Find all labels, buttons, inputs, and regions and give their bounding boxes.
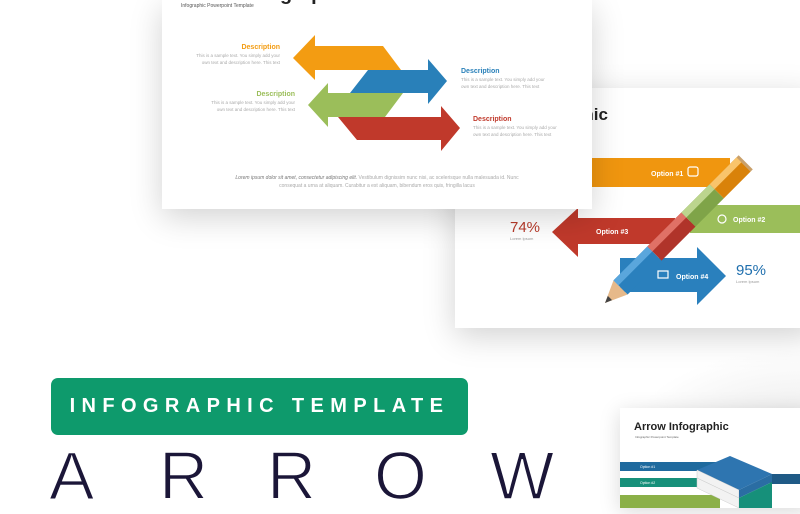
- description: green: Description: [256, 91, 295, 98]
- description: blue: own text and description here. This text: [461, 84, 539, 89]
- description: blue: This is a sample text. You simply add your: [461, 77, 545, 82]
- badge: infographic template: INFOGRAPHIC TEMPLATE: [70, 395, 449, 417]
- bands: Option #1: [640, 465, 655, 469]
- stat: 74%: 74%: [510, 219, 540, 236]
- heading: ARROW: W: [490, 438, 554, 514]
- band: orange option 1: [455, 158, 730, 187]
- slide: four arrows: [162, 0, 592, 209]
- bands: [620, 462, 800, 508]
- description: red: [473, 116, 557, 137]
- description: orange: [196, 44, 280, 65]
- bands: Option #2: [640, 481, 655, 485]
- footer text: [235, 175, 519, 189]
- stat: 95%: Lorem Ipsum: [736, 279, 759, 284]
- description: red: Description: [473, 116, 512, 123]
- description: green: own text and description here. This text: [217, 107, 295, 112]
- slide: pencil arrows: [455, 88, 800, 328]
- stat: 95%: 95%: [736, 262, 766, 279]
- heading: ARROW: R: [267, 438, 316, 514]
- band: green option 2: [690, 205, 800, 233]
- arrow: blue option 4: Option #4: [676, 274, 708, 281]
- description: orange: This is a sample text. You simply add your: [196, 53, 280, 58]
- description: blue: Description: [461, 68, 500, 75]
- arrow: red: [338, 106, 460, 151]
- arrows chart: [293, 35, 460, 151]
- book stack: [697, 456, 772, 508]
- subtitle: Infographic Powerpoint Template: [635, 435, 679, 439]
- description: red: This is a sample text. You simply add your: [473, 125, 557, 130]
- pencil: [598, 155, 753, 310]
- arrow: green: [308, 83, 403, 127]
- footer text: consequat a urna at aliquam. Curabitur a est aliquam, bibendum eros quis, fringilla lacus: [279, 183, 475, 189]
- heading: ARROW: A: [49, 438, 94, 514]
- subtitle: Infographic Powerpoint Template: [181, 3, 254, 9]
- band: green option 2: Option #2: [733, 217, 765, 224]
- description: orange: Description: [241, 44, 280, 51]
- arrow: orange: [293, 35, 401, 80]
- band: orange option 1: Option #1: [651, 171, 683, 178]
- arrow: red option 3: [552, 208, 675, 257]
- description: red: own text and description here. This text: [473, 132, 551, 137]
- description: orange: own text and description here. This text: [202, 60, 280, 65]
- footer text: Lorem ipsum dolor sit amet, consectetur adipiscing elit. Vestibulum dignissim nunc nisi, ac scelerisque nulla malesuada id. Nunc: [235, 175, 519, 181]
- arrow: blue: [350, 59, 447, 104]
- heading: ARROW: R: [159, 438, 208, 514]
- heading: ARROW: O: [374, 438, 427, 514]
- stat: 74%: Lorem Ipsum: [510, 236, 533, 241]
- arrow: red option 3: Option #3: [596, 229, 628, 236]
- slide: books: [620, 408, 800, 508]
- badge: infographic template: [51, 378, 468, 435]
- arrow: blue option 4: [620, 247, 726, 305]
- slide title: Arrow Infographic: [634, 421, 729, 433]
- description: blue: [461, 68, 545, 89]
- description: green: This is a sample text. You simply add your: [211, 100, 295, 105]
- description: green: [211, 90, 295, 112]
- heading: ARROW: [49, 438, 554, 514]
